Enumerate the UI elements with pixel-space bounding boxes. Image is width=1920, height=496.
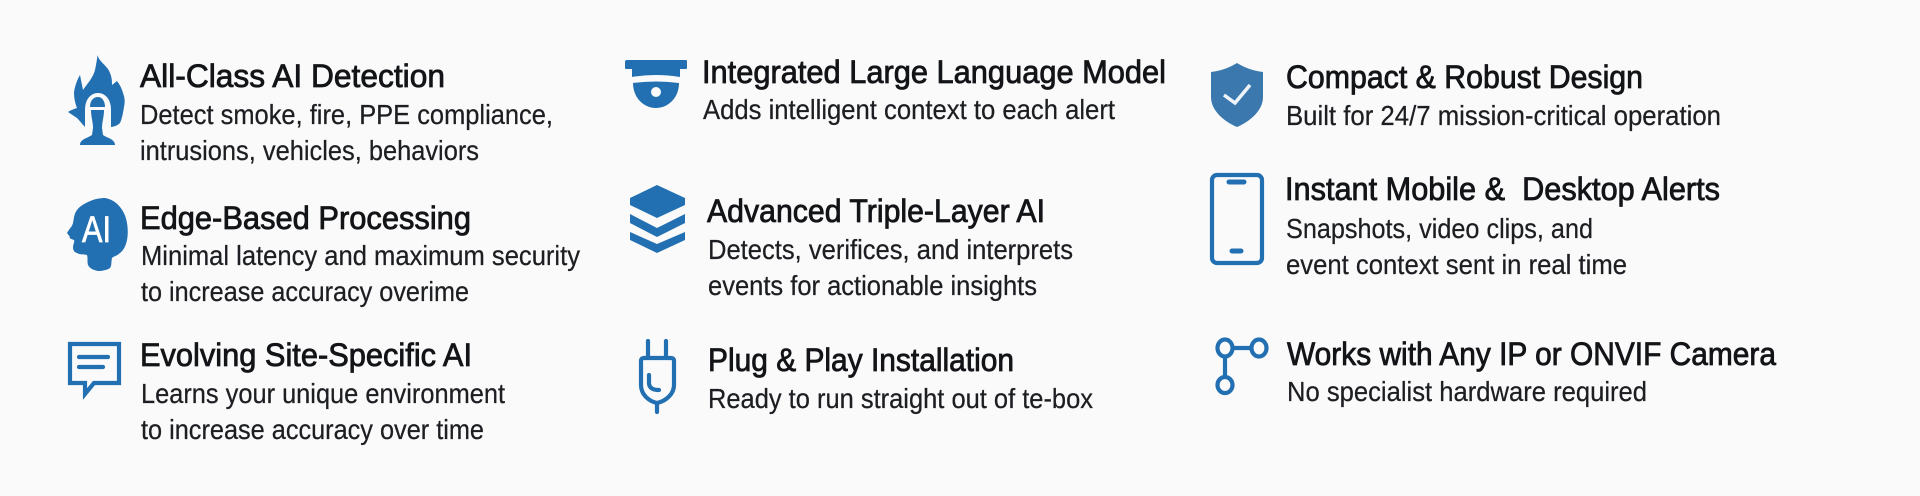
heading: Plug & Play Installation: Plug & Play Installation bbox=[708, 342, 1014, 378]
heading: Evolving Site-Specific AI: Evolving Site-Specific AI bbox=[140, 337, 472, 373]
description: camera compatibility: No specialist hardware required bbox=[1287, 376, 1647, 407]
description: evolving bbox=[141, 378, 505, 445]
feature: Instant Mobile & Desktop Alerts bbox=[1212, 171, 1720, 280]
description: alerts bbox=[1286, 213, 1627, 280]
description: alerts: Snapshots, video clips, and bbox=[1286, 213, 1593, 244]
description: evolving: to increase accuracy over time bbox=[141, 414, 484, 445]
description: alerts: event context sent in real time bbox=[1286, 249, 1627, 280]
description: evolving: Learns your unique environment bbox=[141, 378, 505, 409]
heading: Advanced Triple-Layer AI: Advanced Triple-Layer AI bbox=[707, 193, 1045, 229]
icon: head with AI: AI bbox=[82, 209, 111, 250]
heading: Compact & Robust Design: Compact & Robust Design bbox=[1286, 59, 1643, 95]
feature: All-Class AI Detection bbox=[68, 55, 553, 166]
description: edge: to increase accuracy overime bbox=[141, 276, 469, 307]
feature: Compact & Robust Design bbox=[1211, 59, 1721, 131]
icon: dome camera bbox=[625, 60, 687, 108]
description: triple layer bbox=[708, 234, 1073, 301]
heading: Instant Mobile & Desktop Alerts: Instant Mobile & Desktop Alerts bbox=[1285, 171, 1720, 207]
description: edge bbox=[141, 240, 580, 307]
icon: smartphone bbox=[1212, 175, 1262, 263]
icon: flame with figure bbox=[68, 55, 125, 145]
heading: Edge-Based Processing: Edge-Based Processing bbox=[140, 200, 471, 236]
feature: Advanced Triple-Layer AI bbox=[630, 185, 1073, 301]
description: detection bbox=[140, 99, 553, 166]
icon: shield with check bbox=[1211, 63, 1263, 127]
feature: Plug & Play Installation bbox=[641, 341, 1093, 414]
icon: chat bubble bbox=[70, 344, 119, 394]
heading: All-Class AI Detection: All-Class AI Detection bbox=[140, 58, 445, 94]
description: plug and play: Ready to run straight out of te-box bbox=[708, 383, 1093, 414]
heading: Works with Any IP or ONVIF Camera: Works with Any IP or ONVIF Camera bbox=[1287, 336, 1776, 372]
icon: connected nodes bbox=[1218, 340, 1266, 393]
icon: plug bbox=[641, 341, 674, 412]
description: compact design: Built for 24/7 mission-critical operation bbox=[1286, 100, 1721, 131]
icon: head with AI bbox=[67, 198, 128, 271]
description: edge: Minimal latency and maximum security bbox=[141, 240, 580, 271]
description: triple layer: events for actionable insights bbox=[708, 270, 1037, 301]
feature: Integrated Large Language Model bbox=[625, 54, 1166, 125]
description: triple layer: Detects, verifices, and interprets bbox=[708, 234, 1073, 265]
icon: layer stack bbox=[630, 185, 685, 253]
feature: Evolving Site-Specific AI bbox=[70, 337, 505, 445]
feature: Works with Any IP or ONVIF Camera bbox=[1218, 336, 1776, 407]
description: detection: intrusions, vehicles, behaviors bbox=[140, 135, 479, 166]
description: detection: Detect smoke, fire, PPE compliance, bbox=[140, 99, 553, 130]
heading: Integrated Large Language Model: Integrated Large Language Model bbox=[702, 54, 1166, 90]
description: language model: Adds intelligent context to each alert bbox=[703, 94, 1115, 125]
feature: Edge-Based Processing bbox=[67, 198, 580, 307]
